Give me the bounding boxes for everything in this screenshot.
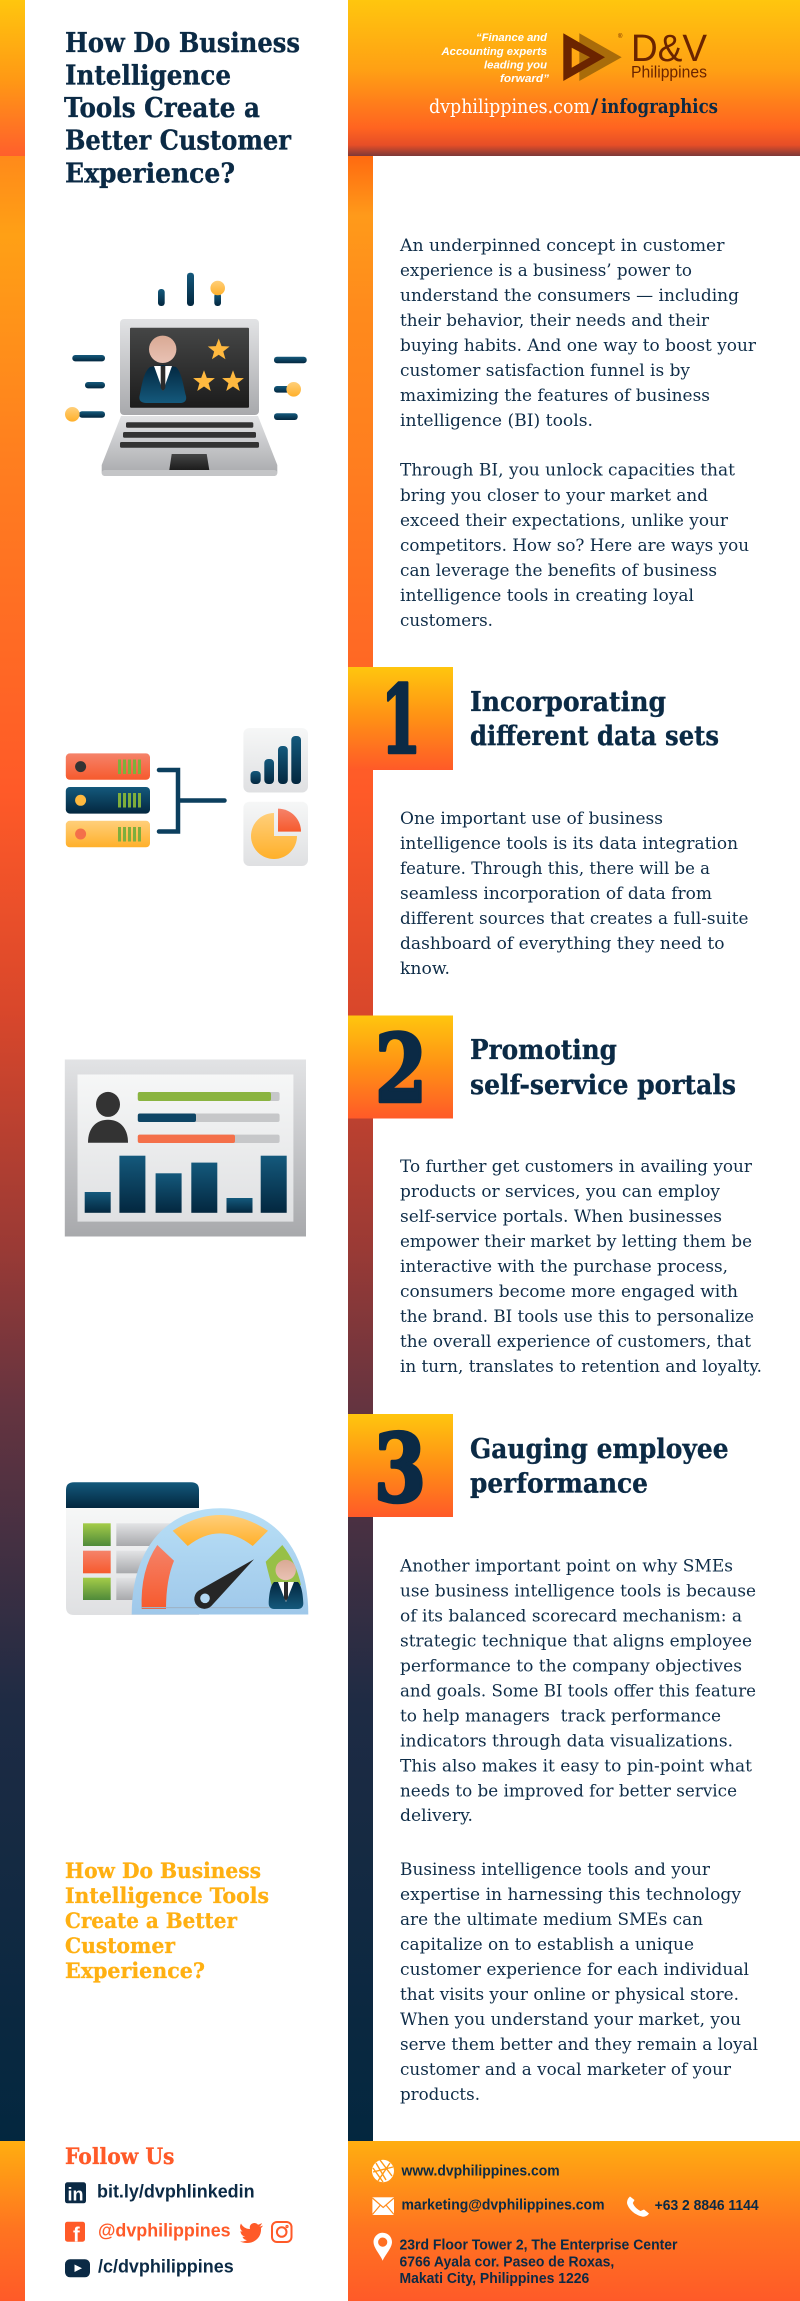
icon: linkedin: in (68, 2184, 84, 2204)
closing text: expertise in harnessing this technology (400, 1885, 741, 1905)
website: www.dvphilippines.com (401, 2163, 560, 2179)
intro text: intelligence (BI) tools. (400, 411, 593, 431)
section 1 heading: Incorporating (470, 687, 666, 718)
section 2 text: To further get customers in availing your (400, 1157, 753, 1177)
section 2 text (400, 1157, 762, 1377)
closing text: Business intelligence tools and your (400, 1860, 711, 1880)
side title repeat: Customer (65, 1933, 176, 1958)
icon: youtube (65, 2259, 90, 2277)
intro text: An underpinned concept in customer (399, 236, 725, 256)
tagline: Accounting experts (440, 46, 547, 58)
address (400, 2238, 678, 2287)
closing text: customer experience for each individual (400, 1960, 749, 1980)
closing text: serve them better and they remain a loyal (400, 2035, 758, 2055)
section 2 text: self-service portals. When businesses (400, 1207, 722, 1227)
section 2 heading: self-service portals (470, 1070, 736, 1101)
section 1 heading (470, 687, 719, 752)
section 3 text: use business intelligence tools is because (400, 1582, 756, 1602)
title (64, 28, 300, 190)
intro text: customer satisfaction funnel is by (400, 361, 690, 381)
section 3 text: to help managers track performance (400, 1706, 721, 1726)
icon: envelope (372, 2197, 394, 2215)
section 2 text: the overall experience of customers, that (400, 1332, 751, 1352)
icon: linkedin (65, 2182, 86, 2204)
phone number: +63 2 8846 1144 (655, 2197, 759, 2214)
website url (429, 94, 718, 118)
follow us block (65, 2144, 292, 2277)
center color strip (348, 156, 373, 2141)
section 3 text: performance to the company objectives (400, 1656, 742, 1676)
social handle: @dvphilippines (98, 2221, 231, 2241)
icon: laptop with customer rating (65, 273, 307, 476)
section 2 number badge (348, 1014, 453, 1124)
logo wordmark: ® (618, 33, 623, 40)
section 2 heading: Promoting (470, 1035, 617, 1066)
title: Better Customer (65, 126, 292, 156)
side title repeat: Create a Better (65, 1908, 238, 1933)
logo wordmark: D&V (631, 28, 708, 70)
icon: self-service dashboard (65, 1060, 306, 1236)
section 2 text: consumers become more engaged with (400, 1282, 738, 1302)
section 3 text: and goals. Some BI tools offer this feature (400, 1682, 756, 1702)
section 2 heading (470, 1035, 736, 1101)
website url: infographics (601, 94, 718, 118)
icon: scorecard and performance gauge (66, 1482, 308, 1615)
section 2 text: products or services, you can employ (400, 1182, 720, 1202)
icon: facebook (65, 2222, 85, 2246)
section 3 text: needs to be improved for better service (400, 1782, 737, 1802)
address: 6766 Ayala cor. Paseo de Roxas, (400, 2254, 614, 2270)
address: Makati City, Philippines 1226 (400, 2271, 589, 2287)
section 1 number badge (348, 666, 453, 776)
icon: globe (372, 2160, 394, 2182)
closing text: that visits your online or physical store. (400, 1985, 739, 2005)
section 2 number badge: 2 (375, 1014, 427, 1124)
section 1 text: know. (400, 959, 450, 979)
title: How Do Business (65, 28, 300, 59)
section 1 text: seamless incorporation of data from (400, 884, 712, 904)
website url: / (591, 94, 599, 118)
title: Tools Create a (64, 93, 260, 124)
tagline: forward” (500, 73, 550, 85)
section 2 text: the brand. BI tools use this to personalize (400, 1307, 754, 1327)
linkedin link: bit.ly/dvphlinkedin (97, 2182, 255, 2202)
section 3 text: indicators through data visualizations. (400, 1732, 733, 1752)
closing text (400, 1860, 758, 2105)
intro text: experience is a business’ power to (400, 261, 692, 281)
intro text: understand the consumers — including (400, 286, 739, 306)
section 3 number badge: 3 (374, 1414, 426, 1524)
side title repeat (65, 1858, 269, 1983)
closing text: customer and a vocal marketer of your (400, 2060, 732, 2080)
intro text: customers. (400, 611, 493, 631)
section 2 text: empower their market by letting them be (400, 1232, 752, 1252)
logo mark (563, 33, 622, 81)
logo wordmark (618, 28, 708, 82)
footer contact panel (348, 2141, 800, 2301)
section 3 text: delivery. (400, 1806, 473, 1826)
icon: phone (627, 2196, 649, 2217)
section 1 text (400, 809, 748, 979)
intro text: Through BI, you unlock capacities that (400, 460, 735, 480)
icon: map pin (374, 2233, 392, 2261)
section 3 number badge (348, 1414, 453, 1524)
section 3 text: Another important point on why SMEs (399, 1556, 733, 1576)
logo wordmark: Philippines (631, 64, 707, 82)
left color strip (0, 0, 25, 2301)
intro text: maximizing the features of business (400, 386, 710, 406)
intro text: competitors. How so? Here are ways you (400, 536, 749, 556)
intro text: can leverage the benefits of business (400, 561, 717, 581)
closing text: When you understand your market, you (400, 2010, 741, 2030)
section 1 number badge: 1 (381, 666, 421, 776)
icon: instagram (272, 2222, 292, 2242)
title: Intelligence (65, 60, 231, 92)
intro text: bring you closer to your market and (400, 486, 708, 506)
section 1 heading: different data sets (470, 721, 719, 752)
section 3 text: This also makes it easy to pin-point what (400, 1756, 752, 1776)
section 3 text: of its balanced scorecard mechanism: a (400, 1606, 742, 1626)
section 1 text: intelligence tools is its data integration (400, 834, 738, 854)
follow us heading: Follow Us (65, 2144, 174, 2170)
section 3 heading: performance (470, 1468, 648, 1500)
section 2 text: interactive with the purchase process, (400, 1257, 728, 1277)
section 2 text: in turn, translates to retention and loyalty. (400, 1357, 762, 1377)
section 3 text (399, 1556, 756, 1826)
tagline (440, 32, 550, 85)
intro text: intelligence tools in creating loyal (400, 586, 694, 606)
tagline: “Finance and (476, 32, 547, 44)
intro text: their behavior, their needs and their (400, 311, 710, 331)
email: marketing@dvphilippines.com (402, 2197, 604, 2213)
intro text (399, 236, 757, 631)
section 1 text: feature. Through this, there will be a (400, 859, 710, 879)
closing text: capitalize on to establish a unique (400, 1935, 694, 1955)
side title repeat: How Do Business (65, 1858, 261, 1883)
section 3 heading (470, 1434, 729, 1500)
section 1 text: different sources that creates a full-suite (400, 909, 748, 929)
closing text: products. (400, 2085, 480, 2105)
title: Experience? (65, 158, 235, 190)
icon: facebook: f (73, 2224, 80, 2246)
youtube link: /c/dvphilippines (98, 2257, 234, 2277)
icon: twitter (240, 2223, 263, 2243)
header banner (348, 0, 800, 156)
tagline: leading you (484, 60, 547, 72)
intro text: buying habits. And one way to boost your (400, 336, 757, 356)
icon: servers feeding charts (66, 728, 308, 866)
address: 23rd Floor Tower 2, The Enterprise Center (400, 2238, 678, 2254)
section 3 text: strategic technique that aligns employee (400, 1632, 752, 1652)
section 1 text: One important use of business (400, 809, 663, 829)
website url: dvphilippines.com (429, 94, 590, 118)
section 3 heading: Gauging employee (470, 1434, 729, 1465)
section 1 text: dashboard of everything they need to (400, 934, 724, 954)
closing text: are the ultimate medium SMEs can (400, 1910, 703, 1930)
side title repeat: Experience? (65, 1958, 205, 1983)
side title repeat: Intelligence Tools (65, 1883, 269, 1908)
intro text: exceed their expectations, unlike your (400, 511, 729, 531)
